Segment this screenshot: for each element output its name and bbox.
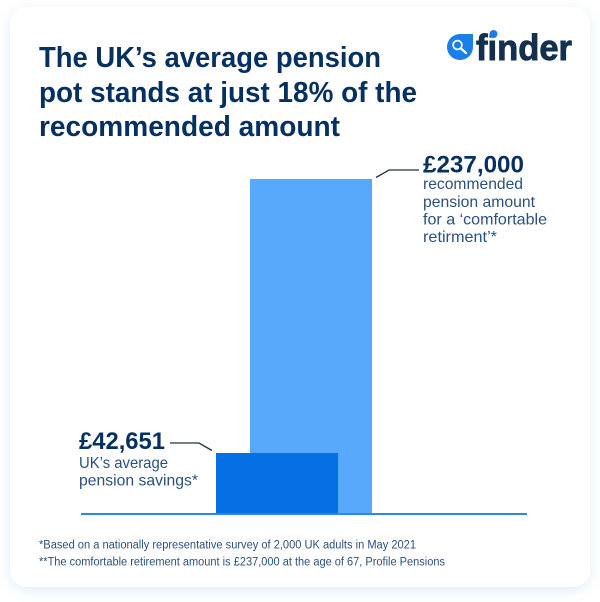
bar: recommended amount: [250, 179, 372, 514]
footnotes: **The comfortable retirement amount is £237,000 at the age of 67, Profile Pensions: [39, 556, 445, 568]
bar: average savings: [216, 453, 338, 514]
leader line: [376, 170, 419, 178]
footnotes: *Based on a nationally representative survey of 2,000 UK adults in May 2021: [39, 540, 416, 552]
description: [79, 455, 198, 490]
description: [423, 176, 547, 246]
description: UK’s average: [79, 455, 168, 472]
description: for a ‘comfortable: [423, 212, 547, 228]
footnotes: [39, 540, 445, 568]
callout: average: [79, 428, 212, 490]
title: recommended amount: [39, 111, 340, 143]
description: recommended: [423, 176, 523, 193]
callout: recommended: [376, 152, 547, 246]
logo wordmark: finder: [476, 27, 572, 68]
icon: search drop: [447, 34, 473, 60]
description: retirment’*: [423, 229, 497, 246]
title: [39, 42, 417, 143]
description: pension savings*: [79, 472, 198, 490]
value: £237,000: [423, 152, 524, 178]
title: pot stands at just 18% of the: [39, 77, 417, 109]
bar chart: [81, 179, 527, 515]
chart baseline: [81, 513, 527, 515]
title: The UK’s average pension: [39, 42, 381, 74]
leader line: [170, 443, 212, 450]
description: pension amount: [423, 194, 536, 211]
logo: finder: [447, 27, 572, 68]
value: £42,651: [79, 428, 165, 455]
logo dot: [490, 30, 498, 38]
